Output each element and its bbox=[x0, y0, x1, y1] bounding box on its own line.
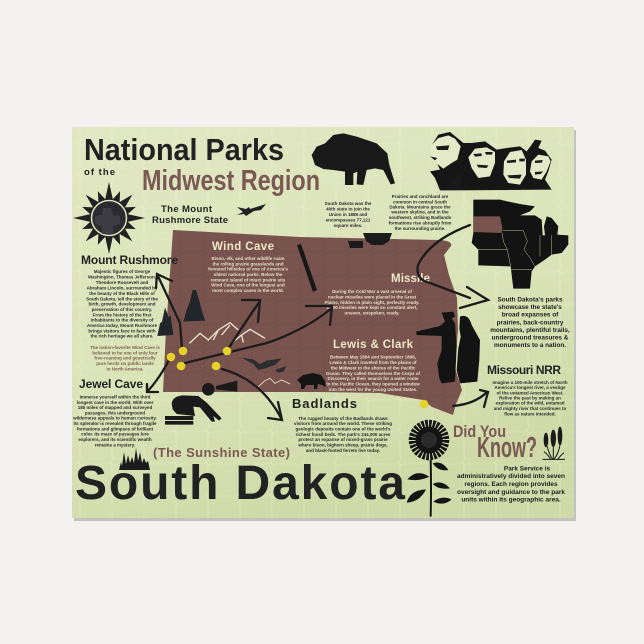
text: Wind Cave note: believed to be one of only four bbox=[92, 350, 158, 355]
heading and text: Missile: 1,000 missiles were kept on constant alert, bbox=[326, 305, 418, 310]
text: statehood facts: 40th state to join the bbox=[326, 206, 370, 212]
heading and text: Wind Cave: remnant island of intact prairie sits bbox=[211, 277, 286, 282]
icon: Mount Rushmore faces bbox=[429, 132, 552, 190]
text: statehood facts: encompasses 77,121 bbox=[326, 218, 371, 222]
heading and text: Badlands: The rugged beauty of the Badlands draws bbox=[298, 416, 388, 421]
icon: crawling figure bbox=[165, 381, 237, 425]
text: Did You Know fact: oversight and guidance to the park bbox=[457, 489, 565, 496]
heading and text: Lewis and Clark: Between May 1804 and September 1806, bbox=[330, 354, 416, 360]
subtitle: The Sunshine State: (The Sunshine State) bbox=[153, 445, 290, 460]
heading and text: Missile bbox=[325, 273, 430, 316]
heading and text: Mount Rushmore bbox=[81, 253, 178, 339]
text: Did You Know fact: Park Service is bbox=[504, 466, 551, 472]
state nickname: The Mount Rushmore State: Rushmore State bbox=[152, 215, 228, 226]
heading and text: Missile: During the Cold War a vast arsenal of bbox=[332, 289, 412, 294]
heading and text: Mount Rushmore: America today, Mount Rushmore bbox=[87, 323, 158, 328]
heading and text: Missouri NRR: America's longest river, a vestige bbox=[494, 385, 566, 390]
title: National Parks bbox=[84, 132, 284, 167]
icon: spear shape bbox=[297, 244, 317, 292]
heading and text: Wind Cave: Wind Cave bbox=[212, 241, 274, 253]
text: Wind Cave note: free-roaming and genetically bbox=[94, 356, 156, 361]
heading: Did You Know: Did You bbox=[453, 422, 506, 441]
heading and text: Missouri NRR: of the untamed American West. bbox=[496, 390, 564, 395]
heading and text: Lewis and Clark: Lewis & Clark bbox=[333, 339, 414, 351]
icon: mountain range bbox=[189, 323, 265, 343]
heading and text: Missouri NRR: Imagine a 100-mile stretch of North bbox=[492, 380, 568, 385]
park location markers bbox=[167, 347, 428, 408]
heading and text: Lewis and Clark: Ocean. They called themselves the Corps of bbox=[326, 371, 421, 376]
heading and text: Jewel Cave: wilderness appeals to human curiosity. bbox=[72, 416, 157, 421]
heading and text: Missouri NRR: exploration of the wild, untamed bbox=[495, 401, 565, 406]
state nickname: The Mount Rushmore State: The Mount bbox=[161, 204, 213, 215]
heading and text: Jewel Cave: 180 miles of mapped and surveyed bbox=[78, 405, 153, 410]
map of Midwest states bbox=[472, 200, 568, 289]
heading and text: Badlands: where bison, bighorn sheep, prairie dogs, bbox=[297, 442, 388, 448]
heading and text: Mount Rushmore: birth, growth, development and bbox=[88, 302, 156, 307]
heading and text: Jewel Cave: explorers, and its scientific wealth bbox=[78, 437, 152, 442]
text: prairies and landscape: Prairies and ranchland are bbox=[392, 194, 449, 199]
text: prairies and landscape: common in central South bbox=[393, 200, 447, 204]
heading and text: Lewis and Clark: into the west for the young United States. bbox=[329, 387, 417, 392]
title: South Dakota: South Dakota bbox=[75, 457, 405, 510]
heading and text: Mount Rushmore: Theodore Roosevelt and bbox=[96, 280, 149, 285]
text: Did You Know fact: administratively divided into seven bbox=[457, 473, 565, 480]
heading and text: Missouri NRR bbox=[487, 363, 568, 416]
heading and text: Badlands: and black-footed ferrets live today. bbox=[306, 448, 380, 453]
icon: cattails bbox=[543, 427, 565, 459]
text: South Dakota's parks summary: monuments to a nation. bbox=[494, 342, 566, 349]
heading and text: Jewel Cave: passages, this underground bbox=[85, 410, 145, 415]
state map of South Dakota bbox=[163, 230, 462, 415]
heading and text: Jewel Cave bbox=[72, 377, 157, 447]
heading and text: Mount Rushmore: Majestic figures of George bbox=[94, 269, 151, 274]
heading and text: Badlands: richest fossil beds. The park's 244,000 acres bbox=[296, 432, 391, 437]
heading and text: Jewel Cave: Its splendor is revealed through fragile bbox=[73, 421, 157, 426]
heading and text: Mount Rushmore: From the history of the first bbox=[93, 312, 152, 317]
text: Wind Cave note: in North America. bbox=[106, 366, 144, 371]
heading and text: Mount Rushmore: the beauty of the Black Hills of bbox=[89, 291, 155, 296]
heading and text: Wind Cave: the rolling prairie grasslands and bbox=[212, 261, 284, 266]
title bbox=[84, 132, 320, 197]
heading and text: Badlands: Badlands bbox=[292, 396, 357, 411]
heading and text: Missouri NRR: Relive the past by making an bbox=[499, 396, 561, 400]
heading and text: Mount Rushmore: the rich heritage we all share. bbox=[90, 334, 154, 339]
heading and text: Lewis and Clark bbox=[326, 339, 421, 392]
icon: bats bbox=[242, 358, 287, 373]
icon: sunflower bbox=[407, 424, 452, 517]
heading and text: Missile: nuclear missiles were placed in the Great bbox=[328, 294, 417, 300]
heading and text: Lewis and Clark: Lewis & Clark traveled from the plains of bbox=[329, 360, 417, 365]
icon: small mountains bbox=[258, 378, 290, 387]
heading and text: Missile: Plains, hidden in plain sight, perfectly ready. bbox=[325, 300, 419, 305]
text: Wind Cave note: The nation-favorite Wind Cave is bbox=[90, 345, 160, 350]
heading and text: Jewel Cave: longest cave in the world. With over bbox=[77, 400, 154, 405]
heading and text: Wind Cave: Bison, elk, and other wildlife roam bbox=[211, 256, 285, 261]
heading and text: Wind Cave: forested hillsides of one of America's bbox=[208, 267, 288, 272]
icon: bat bbox=[237, 204, 266, 216]
heading and text: Mount Rushmore: Abraham Lincoln, surrounded by bbox=[87, 286, 158, 290]
text: prairies and landscape: the surrounding prairie. bbox=[395, 226, 445, 231]
title: Midwest Region bbox=[142, 165, 320, 197]
heading and text: Mount Rushmore: preservation of this country. bbox=[92, 307, 152, 312]
heading and text: Wind Cave: most complex caves in the world. bbox=[212, 288, 284, 293]
icon: pine trees bbox=[157, 290, 205, 336]
text: South Dakota's parks summary: showcase the state's bbox=[498, 304, 562, 311]
heading and text: Jewel Cave: remains a mystery. bbox=[95, 442, 135, 447]
heading and text: Wind Cave bbox=[208, 241, 288, 293]
text: statehood facts: square miles. bbox=[334, 223, 362, 228]
heading and text: Wind Cave: oldest national parks. Below the bbox=[214, 272, 283, 277]
heading and text: Jewel Cave: formations and glimpses of brilliant bbox=[77, 426, 154, 431]
heading and text: Jewel Cave: color. Its maze of passages lure bbox=[81, 432, 149, 437]
icon: sun bbox=[73, 182, 145, 254]
heading and text: Wind Cave: Wind Cave, one of the longest and bbox=[211, 283, 285, 288]
heading and text: Badlands: visitors from around the world. These striking bbox=[294, 421, 392, 426]
heading and text: Missile: unseen, unspoken, ready. bbox=[345, 310, 399, 316]
heading and text: Mount Rushmore: Washington, Thomas Jefferson, bbox=[88, 274, 156, 280]
heading and text: Badlands: geologic deposits contain one of the world's bbox=[295, 426, 391, 431]
heading and text: Jewel Cave: Jewel Cave bbox=[79, 377, 143, 391]
heading: Did You Know: Know? bbox=[477, 432, 537, 464]
text: South Dakota's parks summary: prairies, back-country bbox=[497, 320, 564, 326]
text: statehood facts: South Dakota was the bbox=[325, 201, 372, 206]
state nickname: The Mount Rushmore State bbox=[152, 204, 228, 226]
icon: small bison bbox=[297, 373, 326, 389]
heading: Did You Know bbox=[453, 422, 537, 464]
heading and text: Lewis and Clark: to the Pacific Ocean, they opened a window bbox=[326, 382, 420, 386]
text: South Dakota's parks summary: broad expanses of bbox=[502, 312, 559, 318]
heading and text: Jewel Cave: Immerse yourself within the third bbox=[80, 394, 151, 400]
text: prairies and landscape: southwest, striking Badlands bbox=[389, 215, 452, 220]
text: Did You Know fact: regions. Each region provides bbox=[464, 481, 558, 488]
text: prairies and landscape: western skyline, and in the bbox=[390, 210, 449, 214]
text: prairies and landscape: formations rise abruptly from bbox=[389, 220, 451, 226]
title: of the bbox=[84, 167, 115, 178]
heading and text: Missouri NRR: and mighty river that continues to bbox=[494, 406, 567, 411]
heading and text: Lewis and Clark: Discovery, in their search for a water route bbox=[328, 376, 419, 381]
heading and text: Lewis and Clark: the Midwest to the shores of the Pacific bbox=[331, 366, 416, 370]
text: South Dakota's parks summary: underground treasures & bbox=[492, 334, 569, 342]
heading and text: Missile: Missile bbox=[391, 273, 430, 285]
icon: Lewis and Clark silhouettes bbox=[416, 312, 480, 383]
text: Wind Cave note: pure herds on public lands bbox=[96, 361, 154, 366]
heading and text: Mount Rushmore: inhabitants to the diversity of bbox=[91, 318, 154, 323]
icon: forest skyline bbox=[119, 448, 150, 470]
text: South Dakota's parks summary: mountains, plentiful trails, bbox=[490, 327, 570, 334]
heading and text: Mount Rushmore: brings visitors face to face with bbox=[88, 328, 156, 333]
puzzle board background bbox=[72, 127, 576, 521]
heading and text: Badlands bbox=[292, 396, 392, 453]
text: South Dakota's parks summary: South Dakota's parks bbox=[497, 296, 563, 304]
icon: covered wagon bbox=[348, 233, 392, 248]
text: prairies and landscape: Dakota. Mountains grace the bbox=[389, 204, 451, 210]
icon: bison bbox=[312, 133, 395, 185]
text: statehood facts: Union in 1889 and bbox=[329, 212, 368, 217]
heading and text: Missouri NRR: flow as nature intended. bbox=[504, 411, 556, 416]
text: Did You Know fact: units within its geographic area. bbox=[461, 496, 561, 504]
arrows from park locations bbox=[147, 225, 488, 420]
heading and text: Badlands: protect an expanse of mixed-grass prairie bbox=[298, 437, 388, 442]
heading and text: Missouri NRR: Missouri NRR bbox=[487, 363, 561, 377]
heading and text: Mount Rushmore: South Dakota, tell the story of the bbox=[86, 296, 158, 301]
heading and text: Mount Rushmore: Mount Rushmore bbox=[81, 253, 178, 267]
